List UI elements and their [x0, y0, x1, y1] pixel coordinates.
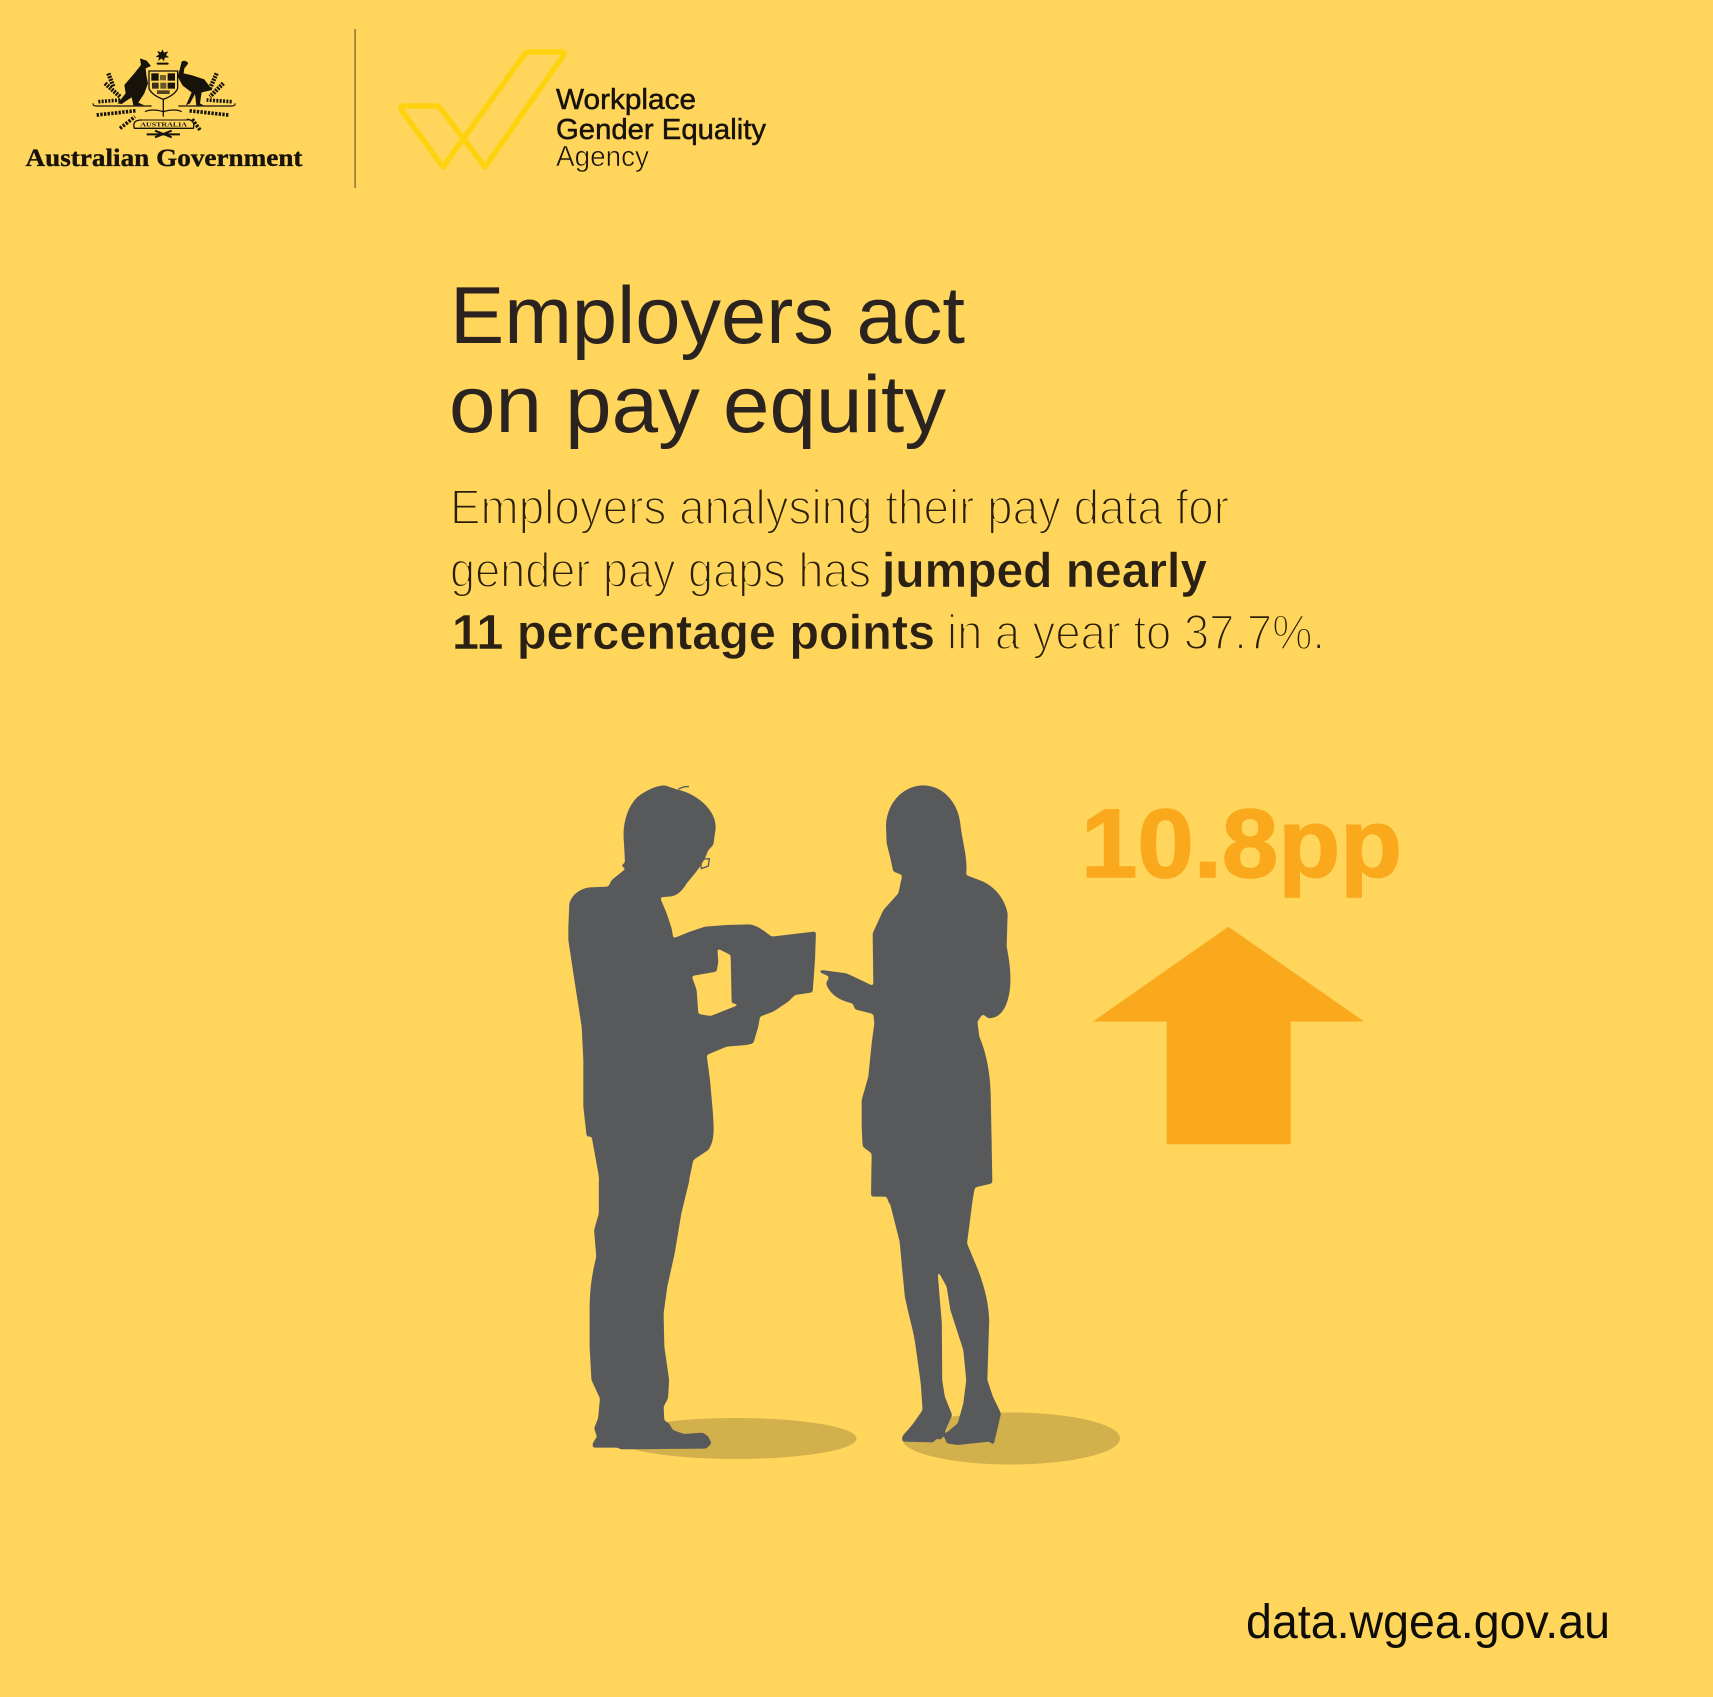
body text: in a year to 37.7%. — [947, 606, 1325, 660]
shadow: woman — [902, 1412, 1120, 1464]
silhouette: man with book — [568, 785, 816, 1449]
text: agency name: Agency — [556, 141, 649, 173]
heading: on pay equity — [449, 360, 947, 450]
body text: Employers analysing their pay data for — [450, 481, 1229, 535]
icon: emu — [178, 61, 212, 105]
body text: 11 percentage points — [452, 606, 935, 660]
icon: kangaroo — [118, 58, 151, 105]
heading: Employers act — [450, 271, 965, 361]
text: agency name: Workplace — [556, 84, 696, 116]
website url: data.wgea.gov.au — [1246, 1596, 1610, 1649]
text: agency name: Gender Equality — [556, 114, 766, 146]
icon: crest torse — [157, 63, 169, 65]
body text: gender pay gaps has — [450, 544, 871, 598]
icon: check mark — [401, 52, 564, 167]
silhouette: woman pointing — [818, 785, 1010, 1445]
heading — [449, 271, 965, 450]
icon: glasses — [678, 787, 709, 869]
icon: shield — [149, 71, 178, 99]
text: Australian Government: Australian Government — [26, 145, 303, 172]
logo: Australian Government crest — [26, 49, 303, 172]
arrow: up — [1093, 927, 1364, 1144]
illustration: two people talking — [568, 785, 1120, 1464]
text: agency name — [556, 84, 766, 173]
shadow: man — [616, 1418, 856, 1459]
body text — [450, 481, 1325, 660]
text: crest banner: AUSTRALIA — [140, 122, 188, 129]
body text: jumped nearly — [881, 544, 1207, 598]
icon: branches and foliage — [93, 73, 235, 137]
icon: crest star — [156, 49, 169, 61]
stat: 10.8pp: 10.8pp — [1081, 789, 1402, 898]
logo: Workplace Gender Equality Agency — [401, 52, 766, 173]
